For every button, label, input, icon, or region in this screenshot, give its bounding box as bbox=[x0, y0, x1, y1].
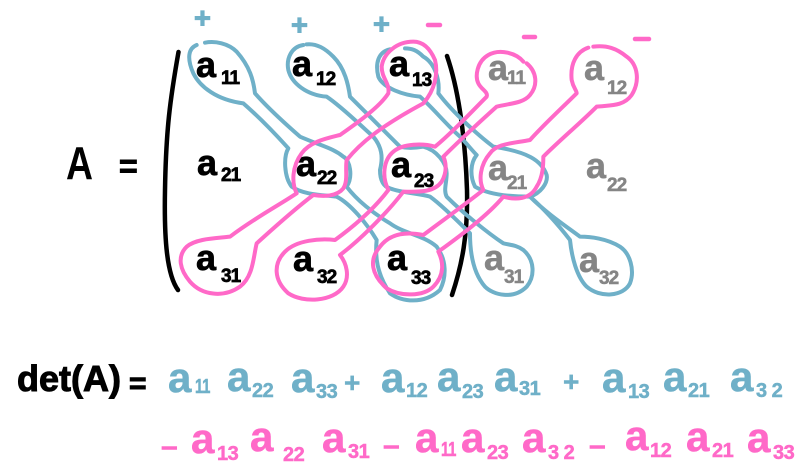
det(A) label: det(A) bbox=[17, 358, 121, 399]
negative terms: – bbox=[589, 429, 606, 462]
matrix elements and diagonals bbox=[165, 42, 637, 300]
black matrix entries: a bbox=[391, 144, 412, 185]
right matrix bracket bbox=[447, 56, 467, 295]
gray repeated columns bbox=[484, 47, 627, 289]
label: matrix name A equals: = bbox=[119, 148, 138, 184]
positive terms: 11 bbox=[195, 376, 210, 398]
black matrix entries: a bbox=[389, 43, 410, 84]
positive terms bbox=[168, 353, 783, 403]
pink negative diagonals bbox=[181, 42, 637, 300]
gray repeated columns: 11 bbox=[507, 68, 527, 89]
positive terms: a bbox=[602, 354, 626, 401]
negative terms: 13 bbox=[217, 443, 239, 465]
black matrix entries bbox=[196, 43, 434, 289]
plus signs bbox=[194, 3, 390, 42]
negative terms bbox=[161, 412, 795, 466]
positive terms: 21 bbox=[688, 380, 710, 402]
black matrix entries: 23 bbox=[414, 171, 434, 192]
negative terms: a bbox=[625, 412, 649, 459]
negative terms: 33 bbox=[773, 442, 795, 464]
black matrix entries: a bbox=[196, 237, 217, 278]
positive terms: 31 bbox=[519, 378, 541, 400]
negative terms: – bbox=[161, 430, 178, 463]
black matrix entries: 13 bbox=[412, 70, 432, 91]
negative terms: 11 bbox=[441, 439, 456, 461]
black matrix entries: 11 bbox=[221, 68, 241, 89]
gray repeated columns: 32 bbox=[599, 268, 619, 289]
negative terms: a bbox=[522, 414, 546, 461]
positive terms: a bbox=[291, 354, 315, 401]
gray repeated columns: a bbox=[579, 239, 600, 280]
black matrix entries: 33 bbox=[411, 268, 431, 289]
gray repeated columns: a bbox=[584, 47, 605, 88]
positive terms: a bbox=[494, 353, 518, 400]
label: matrix name A equals: A bbox=[66, 137, 93, 189]
black matrix entries: 22 bbox=[317, 168, 337, 189]
gray repeated columns: a bbox=[586, 145, 607, 186]
plus signs: + bbox=[291, 10, 308, 42]
label: matrix name A equals bbox=[66, 137, 138, 189]
positive terms: 3 2 bbox=[756, 380, 783, 402]
positive terms: + bbox=[563, 366, 579, 397]
negative terms: – bbox=[383, 429, 400, 462]
blue positive diagonals bbox=[189, 42, 632, 300]
black matrix entries: a bbox=[196, 44, 217, 85]
gray repeated columns: a bbox=[488, 47, 509, 88]
positive terms: 23 bbox=[462, 381, 484, 403]
negative terms: 31 bbox=[348, 441, 370, 463]
positive terms: 12 bbox=[406, 380, 428, 402]
gray repeated columns: 12 bbox=[607, 78, 627, 99]
plus signs: + bbox=[373, 9, 390, 41]
gray repeated columns: 22 bbox=[607, 175, 627, 196]
positive terms: a bbox=[227, 353, 251, 400]
gray repeated columns: a bbox=[484, 237, 505, 278]
negative terms: 22 bbox=[283, 444, 305, 466]
black matrix entries: 21 bbox=[221, 165, 242, 186]
left matrix bracket bbox=[165, 52, 178, 290]
determinant formula bbox=[17, 353, 795, 466]
positive terms: a bbox=[663, 353, 687, 400]
black matrix entries: 12 bbox=[316, 69, 336, 90]
positive terms: 22 bbox=[252, 380, 274, 402]
gray repeated columns: 21 bbox=[507, 173, 528, 194]
gray repeated columns: a bbox=[488, 147, 509, 188]
black matrix entries: a bbox=[296, 143, 317, 184]
negative terms: a bbox=[191, 415, 215, 462]
equals sign: = bbox=[129, 367, 147, 400]
positive terms: a bbox=[437, 353, 461, 400]
positive terms: a bbox=[381, 354, 405, 401]
black matrix entries: a bbox=[292, 43, 313, 84]
negative terms: a bbox=[415, 414, 439, 461]
minus signs bbox=[428, 25, 649, 39]
negative terms: a bbox=[322, 414, 346, 461]
column signs bbox=[194, 3, 649, 42]
negative terms: a bbox=[250, 413, 274, 460]
black matrix entries: a bbox=[293, 238, 314, 279]
positive terms: a bbox=[168, 354, 192, 401]
black matrix entries: a bbox=[197, 142, 218, 183]
negative terms: 12 bbox=[650, 440, 672, 462]
negative terms: 21 bbox=[712, 440, 734, 462]
positive terms: + bbox=[344, 367, 360, 398]
negative terms: 23 bbox=[487, 442, 509, 464]
black matrix entries: 32 bbox=[317, 267, 337, 288]
positive terms: a bbox=[730, 353, 754, 400]
negative terms: a bbox=[747, 414, 771, 461]
negative terms: a bbox=[686, 413, 710, 460]
positive terms: 33 bbox=[316, 381, 338, 403]
black matrix entries: a bbox=[387, 237, 408, 278]
plus signs: + bbox=[194, 3, 211, 35]
negative terms: 3 2 bbox=[548, 442, 575, 464]
black matrix entries: 31 bbox=[221, 266, 242, 287]
negative terms: a bbox=[461, 414, 485, 461]
positive terms: 13 bbox=[628, 381, 650, 403]
gray repeated columns: 31 bbox=[504, 267, 525, 288]
